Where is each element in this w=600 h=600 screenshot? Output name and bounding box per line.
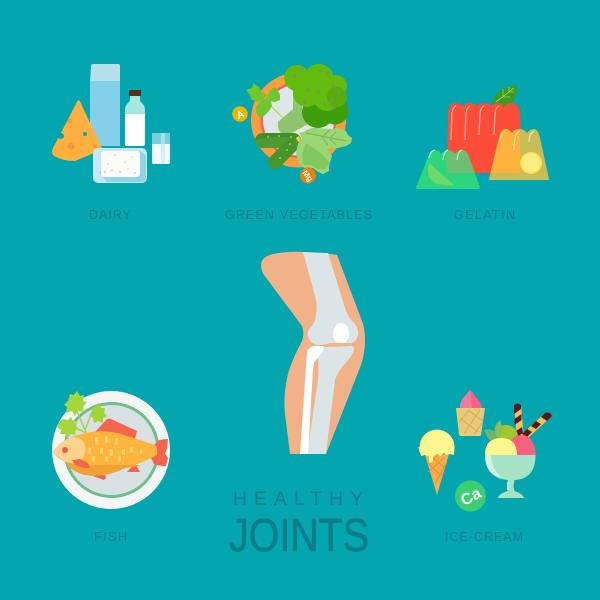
icon: milk carton bbox=[90, 64, 120, 146]
icon: broccoli bbox=[278, 64, 348, 136]
icon: tail bbox=[150, 439, 168, 466]
icon: vitamin A badge bbox=[232, 106, 248, 122]
icon: cup with pink swirl bbox=[456, 390, 485, 436]
icon: plate bbox=[52, 391, 170, 509]
label: fish: FISH bbox=[94, 530, 127, 544]
icon: green jelly with lime bbox=[416, 150, 480, 189]
infographic canvas bbox=[52, 64, 552, 552]
icon: lower fins bbox=[92, 463, 140, 480]
icon: leaf bbox=[492, 85, 517, 107]
fibula bbox=[300, 346, 324, 454]
icon: sundae scoops bbox=[485, 435, 536, 455]
icon: red jelly bbox=[447, 103, 523, 173]
label: green vegetables: GREEN VEGETABLES bbox=[225, 208, 372, 222]
icon: wafers bbox=[514, 404, 552, 439]
icon: plate bbox=[251, 72, 346, 168]
icon: lettuce leaf bbox=[296, 128, 352, 174]
panel: gelatin bbox=[416, 85, 549, 222]
panel: fish bbox=[52, 391, 170, 544]
tibia bbox=[307, 346, 354, 454]
panel: ice-cream bbox=[418, 390, 552, 544]
patella bbox=[333, 323, 349, 343]
icon: calcium badge bbox=[455, 480, 486, 512]
icon: cone with yellow scoop bbox=[418, 430, 454, 495]
label: ice-cream: ICE-CREAM bbox=[445, 530, 523, 544]
label: gelatin: GELATIN bbox=[454, 208, 515, 222]
icon: magnesium badge: Mg bbox=[300, 169, 315, 183]
icon: orange jelly with lemon bbox=[489, 129, 549, 180]
panel: green vegetables bbox=[225, 64, 372, 222]
icon: glass of milk bbox=[152, 133, 170, 164]
icon: parsley bbox=[246, 83, 286, 121]
icon: fish body bbox=[53, 431, 157, 476]
femur bbox=[303, 252, 358, 345]
illustration: knee joint bbox=[261, 252, 365, 454]
icon: cheese wedge bbox=[52, 100, 102, 161]
icon: parsley bbox=[57, 391, 107, 438]
heading: healthy: HEALTHY bbox=[233, 489, 363, 510]
icon: cottage cheese tray bbox=[93, 148, 147, 183]
icon: calcium badge: Ca bbox=[458, 485, 484, 510]
icon: dorsal fin bbox=[95, 419, 137, 445]
icon: milk bottle bbox=[125, 90, 145, 146]
label: dairy: DAIRY bbox=[89, 208, 132, 222]
leg silhouette bbox=[261, 252, 365, 454]
icon: vitamin A badge: A bbox=[235, 109, 246, 122]
title: healthy joints bbox=[229, 489, 369, 561]
icon: cucumbers bbox=[255, 133, 301, 162]
heading: joints: JOINTS bbox=[229, 509, 369, 561]
panel: dairy bbox=[52, 64, 170, 222]
icon: lime and leaves bbox=[484, 420, 518, 449]
icon: sundae glass bbox=[485, 455, 536, 498]
